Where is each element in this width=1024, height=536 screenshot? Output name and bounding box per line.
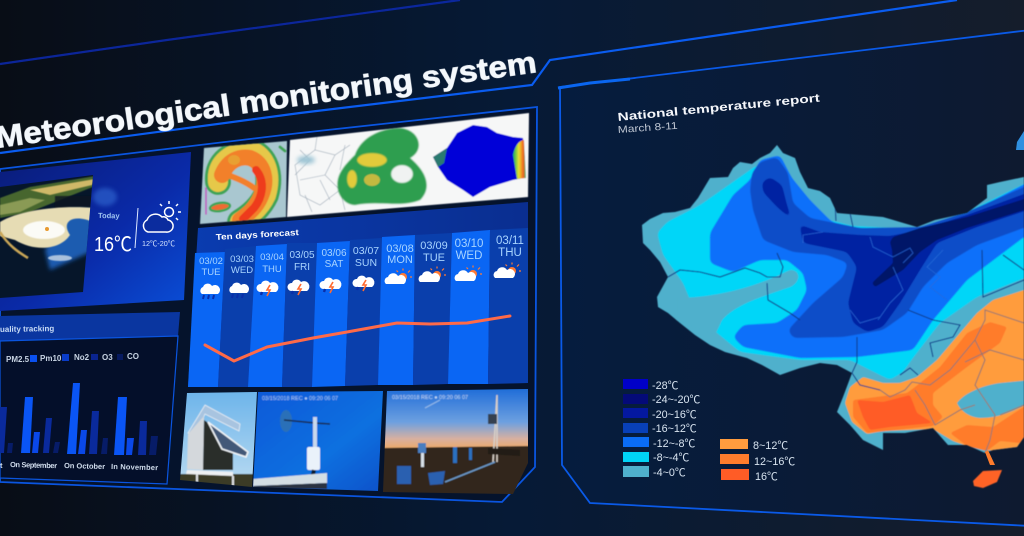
chart legend: CO: [127, 352, 139, 361]
panel: radar image two with region map: [287, 113, 529, 217]
forecast dates and weekdays: THU: [498, 247, 522, 259]
chart month labels: In November: [111, 462, 158, 472]
forecast dates and weekdays: 03/08: [386, 243, 414, 255]
heading: uality tracking: [0, 324, 54, 334]
today label: Today: [98, 211, 120, 220]
photo: weather instrument shelter: [180, 392, 257, 487]
legend: temperature scale: -8~-4℃: [653, 452, 690, 464]
forecast dates and weekdays: FRI: [294, 262, 310, 273]
legend: temperature scale: 8~12℃: [753, 440, 788, 452]
forecast dates and weekdays: TUE: [423, 252, 445, 264]
chart legend: Pm10: [40, 354, 62, 363]
forecast dates and weekdays: 03/09: [420, 240, 448, 252]
chart month labels: [0, 460, 158, 472]
map: north-east fragment: [1016, 131, 1024, 150]
legend: temperature scale: -20~16℃: [652, 409, 697, 421]
legend: temperature scale: -24~-20℃: [652, 394, 701, 406]
panel: air quality tracking: [0, 312, 180, 484]
panel: ten days forecast: [188, 202, 528, 387]
legend: temperature scale: -4~0℃: [653, 467, 686, 479]
cold band: cyan: [657, 165, 1024, 380]
bar chart: [0, 383, 158, 455]
current temperature: 16℃: [94, 234, 132, 256]
top decorative frame: [0, 0, 957, 153]
panel: national temperature report: [558, 30, 1024, 526]
warm band: red orange: [857, 395, 933, 430]
chart legend: [6, 352, 139, 364]
forecast dates and weekdays: [199, 235, 524, 278]
warm band: orange: [853, 322, 1007, 433]
chart legend: O3: [102, 353, 113, 362]
forecast day columns: [188, 228, 528, 387]
title: Meteorological monitoring system: [0, 44, 539, 155]
legend: temperature scale: -12~-8℃: [653, 438, 696, 450]
legend: temperature scale: 16℃: [755, 471, 778, 483]
cold band: dark blue: [762, 177, 1024, 332]
panel corner tab: [558, 79, 630, 88]
weather icons: [200, 262, 521, 299]
panel: central dashboard frame: [0, 107, 537, 502]
heading: National temperature report: [617, 93, 821, 124]
heading: Ten days forecast: [216, 227, 299, 242]
photo: monitoring station at dusk: [380, 388, 530, 495]
forecast dates and weekdays: MON: [387, 254, 413, 266]
photo: wind vane: [250, 388, 386, 494]
forecast dates and weekdays: WED: [456, 250, 482, 262]
provincial borders: [668, 203, 1024, 390]
forecast dates and weekdays: 03/03: [230, 254, 254, 265]
forecast dates and weekdays: 03/06: [321, 248, 347, 259]
forecast dates and weekdays: TUE: [202, 267, 220, 278]
legend: temperature scale: -16~12℃: [652, 423, 697, 435]
forecast dates and weekdays: 03/02: [199, 256, 223, 267]
date: March 8-11: [617, 121, 679, 136]
legend: temperature scale: -28℃: [652, 380, 679, 392]
chart month labels: On October: [64, 461, 105, 471]
chart month labels: t: [0, 461, 3, 470]
cool hole: teal: [957, 380, 1024, 418]
forecast dates and weekdays: SAT: [325, 259, 343, 270]
panel: current weather: [0, 152, 191, 311]
forecast dates and weekdays: 03/11: [496, 235, 524, 247]
icon: partly cloudy: [143, 201, 181, 232]
map: Hainan island: [973, 470, 1002, 488]
panel: radar image one: [200, 141, 287, 224]
temperature range: 12℃-20℃: [142, 239, 175, 248]
cold band: darkest: [872, 194, 1024, 287]
photo: monitoring station at dusk: 03/15/2018 REC ● 09:20 06 07: [392, 395, 468, 401]
forecast dates and weekdays: THU: [262, 264, 282, 275]
warm band: light orange: [845, 285, 1024, 451]
map: southern peninsula: [985, 450, 995, 465]
chart legend: No2: [74, 353, 90, 362]
separator: [135, 208, 138, 248]
cold band: medium blue: [750, 157, 1024, 338]
photo: wind vane: 03/15/2018 REC ● 09:20 06 07: [262, 396, 338, 402]
forecast dates and weekdays: 03/04: [260, 252, 284, 263]
forecast dates and weekdays: WED: [231, 265, 253, 276]
temperature trend line: [205, 316, 510, 361]
forecast dates and weekdays: 03/10: [455, 238, 483, 250]
legend: temperature scale: 12~16℃: [754, 456, 795, 468]
map: temperature distribution: [642, 145, 1024, 453]
chart legend: PM2.5: [6, 355, 30, 364]
chart month labels: On September: [10, 460, 57, 470]
cold band: bright blue: [710, 155, 1024, 358]
cold band: teal tongue: [688, 269, 799, 332]
legend: temperature scale: [623, 379, 795, 483]
forecast dates and weekdays: 03/07: [353, 245, 379, 257]
forecast dates and weekdays: 03/05: [289, 250, 315, 261]
forecast dates and weekdays: SUN: [355, 257, 377, 269]
blue region map: [433, 125, 525, 197]
satellite image: [0, 175, 93, 298]
